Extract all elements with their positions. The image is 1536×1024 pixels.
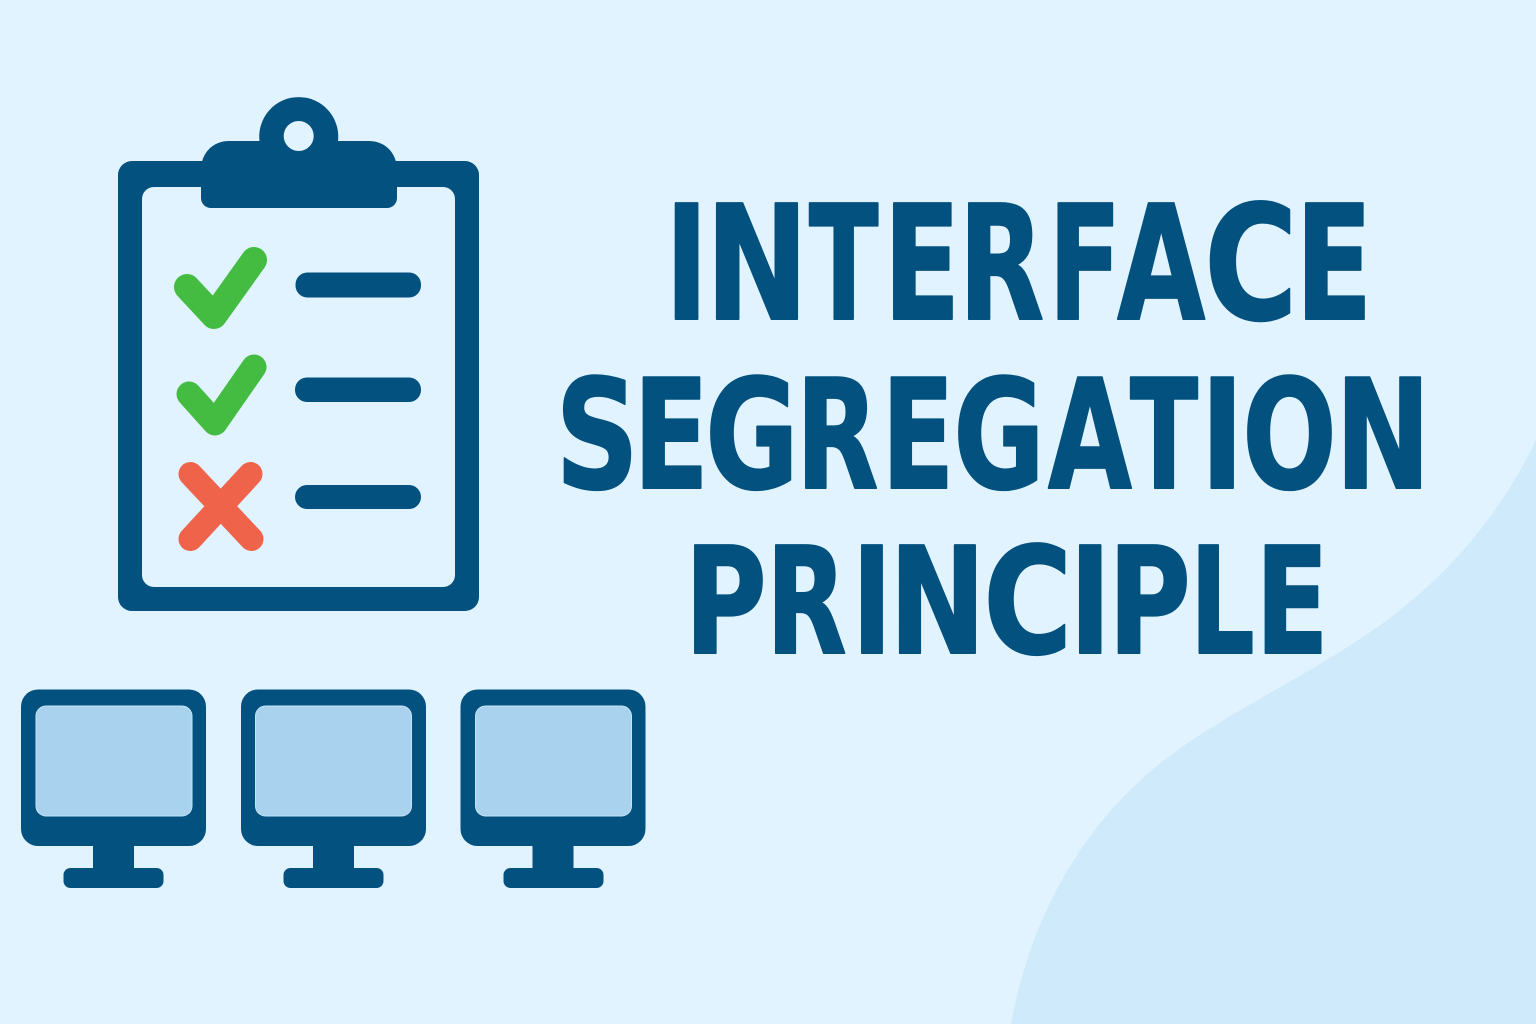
title: E	[633, 347, 709, 524]
checklist line 2	[295, 378, 421, 402]
title: S	[555, 347, 639, 524]
title	[555, 172, 1431, 688]
title: E	[1295, 172, 1372, 357]
title: O	[1242, 347, 1337, 524]
icon: clipboard checklist	[118, 97, 479, 611]
title: N	[705, 172, 809, 357]
background wave shape	[1011, 440, 1536, 1024]
icon: monitor 1	[21, 690, 206, 888]
title: T	[1130, 347, 1198, 524]
title: F	[1048, 172, 1122, 357]
title: C	[983, 516, 1072, 688]
title: P	[684, 516, 767, 688]
title: I	[852, 516, 892, 688]
icon: red cross	[190, 474, 252, 539]
title: E	[882, 347, 954, 524]
title: L	[1190, 516, 1255, 688]
title: T	[809, 172, 878, 357]
checklist line 3	[295, 485, 421, 509]
title: P	[1108, 516, 1191, 688]
icon: green check 2	[189, 367, 254, 423]
title: A	[1117, 172, 1205, 357]
title: R	[796, 347, 878, 524]
title: I	[665, 172, 709, 357]
title: N	[889, 516, 986, 688]
title: E	[1256, 516, 1329, 688]
title: N	[1335, 347, 1431, 524]
icon: green check 1	[187, 260, 254, 316]
title: R	[766, 516, 847, 688]
title: R	[958, 172, 1044, 357]
title: I	[1070, 516, 1111, 688]
checklist line 1	[296, 272, 421, 298]
icon: monitor 3	[460, 690, 646, 888]
title: E	[883, 172, 960, 357]
title: G	[705, 347, 799, 524]
clipboard clip	[201, 97, 397, 208]
title: G	[953, 347, 1045, 524]
icon: monitor 2	[241, 690, 426, 888]
title: A	[1048, 347, 1132, 524]
title: I	[1201, 347, 1244, 524]
clipboard board	[118, 161, 479, 611]
title: C	[1204, 172, 1298, 357]
